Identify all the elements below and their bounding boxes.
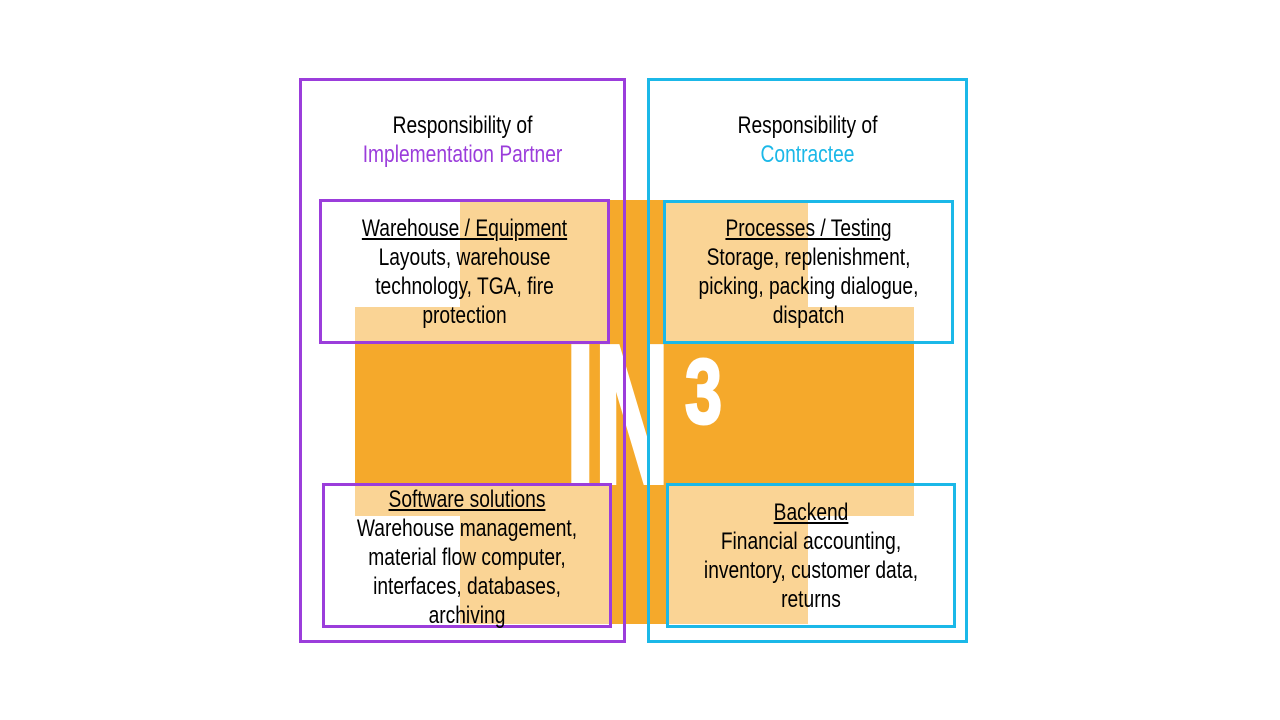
- heading: implementation partner: Responsibility of: [393, 112, 532, 139]
- heading: contractee: Responsibility of: [738, 112, 877, 139]
- box: processes / testing: Processes / Testing: [725, 215, 892, 242]
- box: software solutions: [322, 483, 612, 628]
- box: processes / testing: [663, 200, 954, 344]
- box: backend: inventory, customer data,: [704, 557, 918, 584]
- box: software solutions: archiving: [429, 602, 505, 629]
- panel: contractee: [647, 78, 968, 643]
- box: software solutions: interfaces, databases,: [373, 573, 561, 600]
- box: backend: returns: [781, 586, 841, 613]
- box: warehouse / equipment: Warehouse / Equipment: [362, 215, 567, 242]
- logo text IN3: IN: [566, 305, 669, 524]
- box: software solutions: Warehouse management,: [357, 515, 577, 542]
- box: processes / testing: dispatch: [773, 302, 844, 329]
- heading: contractee: Contractee: [761, 141, 854, 168]
- box: warehouse / equipment: Layouts, warehouse: [379, 244, 550, 271]
- box: warehouse / equipment: [319, 199, 610, 344]
- heading: implementation partner: Implementation Partner: [363, 141, 562, 168]
- box: warehouse / equipment: technology, TGA, fire: [375, 273, 554, 300]
- box: software solutions: Software solutions: [389, 486, 545, 513]
- box: backend: Backend: [774, 499, 848, 526]
- box: backend: [666, 483, 956, 628]
- box: warehouse / equipment: protection: [422, 302, 507, 329]
- heading: contractee: [738, 112, 878, 168]
- box: processes / testing: picking, packing dialogue,: [699, 273, 918, 300]
- box: processes / testing: Storage, replenishment,: [707, 244, 910, 271]
- box: software solutions: material flow computer,: [368, 544, 566, 571]
- heading: implementation partner: [363, 112, 562, 168]
- box: backend: Financial accounting,: [721, 528, 901, 555]
- logo: orange cross: [355, 200, 914, 624]
- panel: implementation partner: [299, 78, 626, 643]
- logo text IN3: 3: [685, 341, 722, 443]
